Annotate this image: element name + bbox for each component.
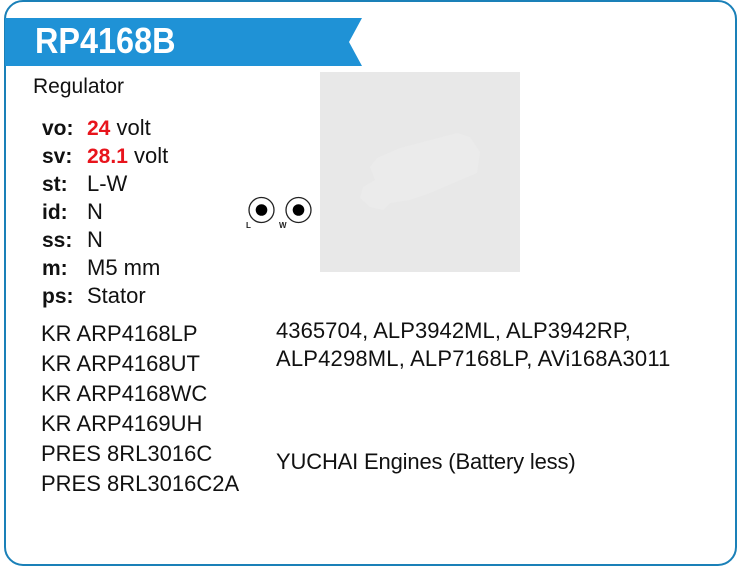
icon: terminal connectors L and W: W [279, 221, 287, 230]
spec: vo: 24 volt [87, 115, 151, 140]
spec: ss: N [87, 227, 103, 252]
icon: terminal connectors L and W [246, 196, 312, 230]
ref: KR ARP4169UH [41, 411, 202, 436]
spec: ss [42, 227, 103, 252]
spec: ps: ps: [42, 285, 74, 308]
list: part cross references [41, 321, 240, 496]
spec: sv: 28.1 volt [87, 143, 168, 168]
spec: st: st: [42, 173, 68, 196]
spec: ps [42, 283, 146, 308]
spec list [42, 115, 168, 308]
spec: m: M5 mm [87, 255, 160, 280]
spec: ps: Stator [87, 283, 146, 308]
spec: st [42, 171, 128, 196]
spec: id: id: [42, 201, 68, 224]
text: OEM numbers: ALP4298ML, ALP7168LP, AVi168A3011 [276, 346, 671, 371]
spec: sv [42, 143, 168, 168]
banner: part number ribbon [5, 18, 362, 66]
icon: terminal connectors L and W: L [246, 221, 251, 230]
spec: id: N [87, 199, 103, 224]
ref: KR ARP4168UT [41, 351, 200, 376]
spec: sv: sv: [42, 145, 72, 168]
spec: ss: ss: [42, 229, 72, 252]
spec: vo [42, 115, 151, 140]
spec: id [42, 199, 103, 224]
ref: KR ARP4168WC [41, 381, 207, 406]
image: faded regulator photo [320, 72, 520, 272]
text: OEM numbers: 4365704, ALP3942ML, ALP3942RP, [276, 318, 631, 343]
spec: st: L-W [87, 171, 127, 196]
text: product type: Regulator [33, 75, 124, 98]
spec: m: m: [42, 257, 68, 280]
ref: PRES 8RL3016C2A [41, 471, 239, 496]
text: OEM numbers [276, 318, 671, 371]
spec: m [42, 255, 160, 280]
text: application: YUCHAI Engines (Battery less) [276, 449, 576, 474]
ref: PRES 8RL3016C [41, 441, 212, 466]
spec: vo: vo: [42, 117, 74, 140]
title: part number: RP4168B [35, 20, 175, 61]
ref: KR ARP4168LP [41, 321, 198, 346]
